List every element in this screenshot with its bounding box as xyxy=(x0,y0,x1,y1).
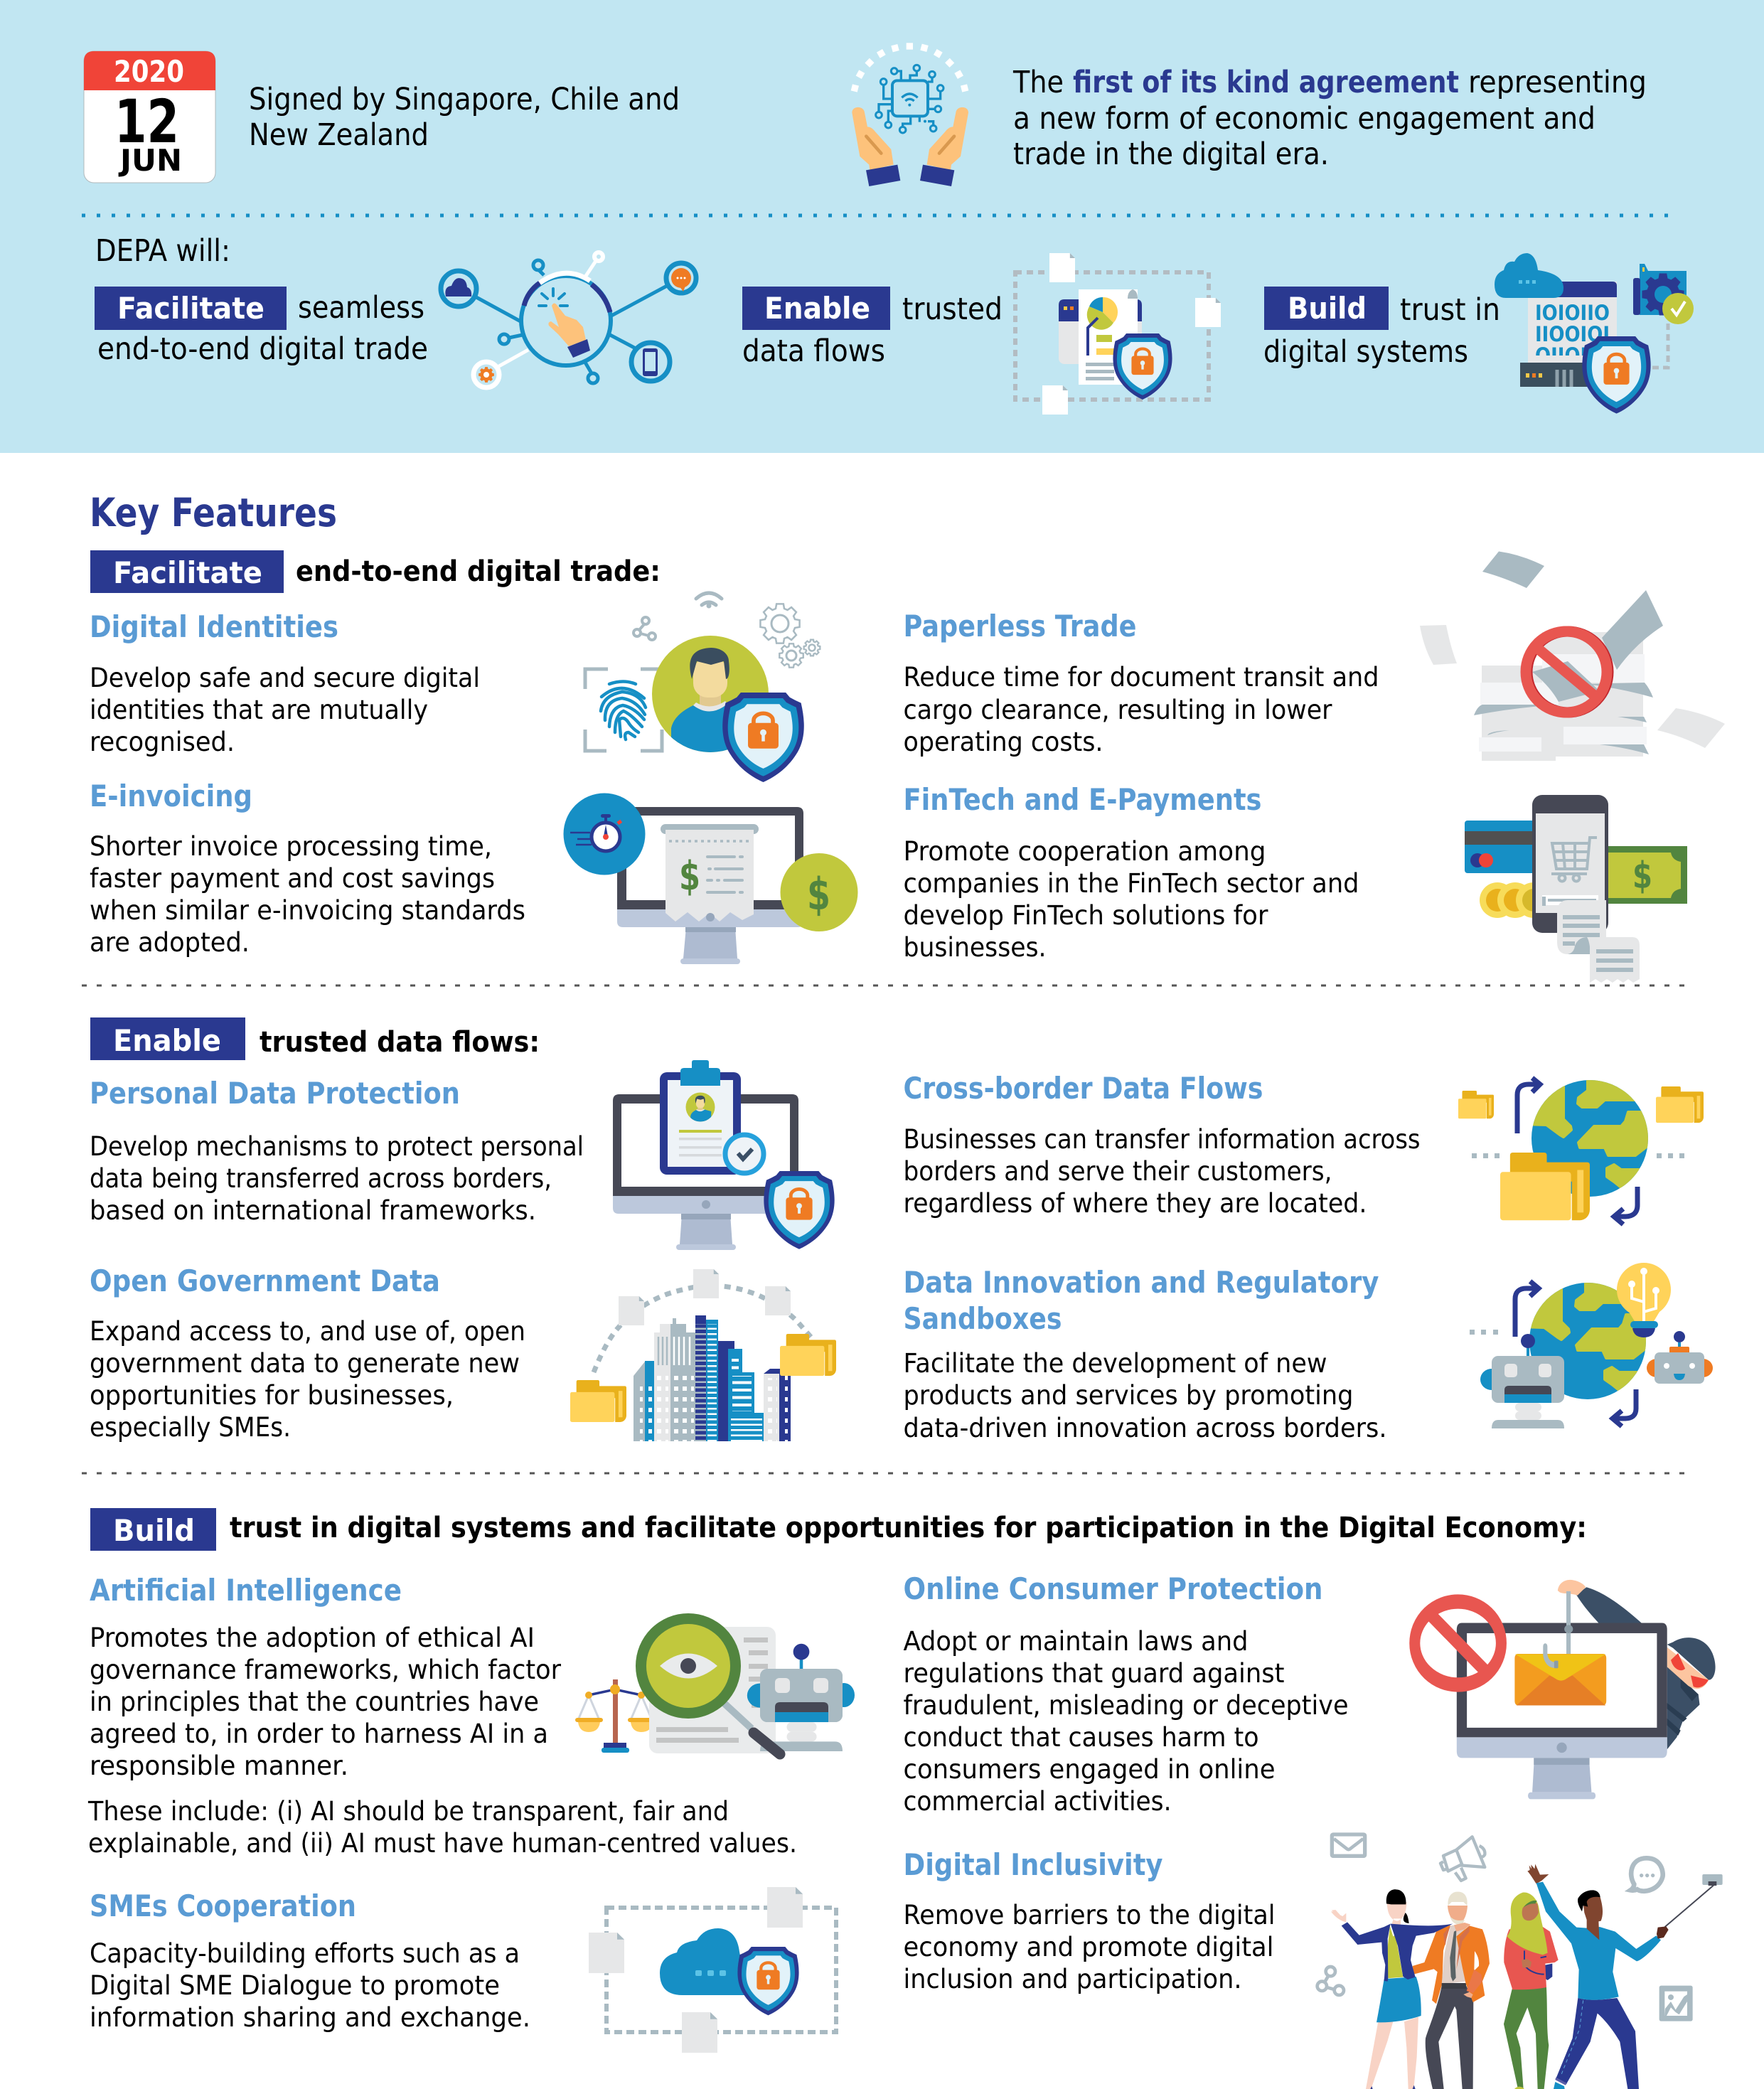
text: first of its kind agreement: first of its kind agreement xyxy=(1073,65,1459,100)
badge: Enable trusted: Enable xyxy=(764,291,870,326)
text: first of its kind agreement: a new form of economic engagement and xyxy=(1013,101,1595,137)
text block: Online Consumer Protection: Adopt or maintain laws and xyxy=(903,1626,1249,1657)
badge: Build trust in xyxy=(1263,287,1500,370)
text block: Digital Inclusivity: economy and promote digital xyxy=(903,1932,1274,1962)
icon: calendar 12 June 2020: JUN xyxy=(118,143,182,178)
text block: Data Innovation and Regulatory Sandboxes: Facilitate the development of new xyxy=(903,1348,1327,1379)
icon: AI ethics, magnifier, scales and robot xyxy=(575,1613,855,1754)
text block: Artificial Intelligence: responsible manner. xyxy=(90,1751,348,1781)
text block: Online Consumer Protection: Online Consumer Protection xyxy=(903,1571,1322,1606)
illustration: diverse group of people with digital icons xyxy=(1317,1834,1723,2089)
text: first of its kind agreement: trade in the digital era. xyxy=(1013,137,1329,172)
badge: Enable trusted: data flows xyxy=(742,333,885,369)
text block: Artificial Intelligence: governance frameworks, which factor xyxy=(90,1655,562,1685)
text: DEPA will: DEPA will: xyxy=(95,233,230,269)
icon: e-payments phone, card, cash xyxy=(1465,795,1687,983)
text block: Artificial Intelligence: in principles that the countries have xyxy=(90,1687,539,1717)
text block: Digital Identities: Digital Identities xyxy=(90,609,338,644)
icon: calendar 12 June 2020: 2020 xyxy=(114,54,184,89)
icon: data innovation globe, bulb and robots xyxy=(1470,1263,1713,1428)
text block: Cross-border Data Flows: Businesses can transfer information across xyxy=(903,1124,1421,1155)
text block: Cross-border Data Flows: Cross-border Data Flows xyxy=(903,1071,1263,1106)
text: first of its kind agreement xyxy=(1012,65,1647,172)
text block: E-invoicing: Shorter invoice processing time, xyxy=(90,831,492,862)
text block: SMEs Cooperation: Capacity-building efforts such as a xyxy=(90,1938,520,1969)
text block: E-invoicing xyxy=(90,779,525,958)
icon: digital identity with fingerprint and shield xyxy=(585,593,820,782)
icon: phishing thief behind monitor xyxy=(1415,1580,1716,1799)
heading: Build trust in digital systems: trust in digital systems and facilitate opportunities for participation in the Digital Economy: xyxy=(230,1512,1587,1544)
text block: Artificial Intelligence: Artificial Intelligence xyxy=(90,1573,402,1608)
icon: secure digital systems with server, cloud and gear folder: IIOOIOI xyxy=(1535,322,1610,346)
icon: personal data clipboard on monitor xyxy=(613,1060,835,1250)
heading: Enable trusted data flows: Enable xyxy=(113,1023,221,1058)
badge: Facilitate seamless: Facilitate xyxy=(117,291,264,326)
text block: Paperless Trade: cargo clearance, resulting in lower xyxy=(903,695,1332,725)
text: signatories: Signed by Singapore, Chile and xyxy=(249,82,680,117)
text block: Digital Inclusivity: Digital Inclusivity xyxy=(903,1847,1163,1882)
text block: SMEs Cooperation xyxy=(90,1888,530,2033)
text block: Digital Identities xyxy=(90,609,480,757)
text block: Artificial Intelligence: agreed to, in order to harness AI in a xyxy=(90,1719,548,1749)
text block: Cross-border Data Flows: borders and serve their customers, xyxy=(903,1156,1332,1187)
text block: Digital Inclusivity: Remove barriers to the digital xyxy=(903,1900,1276,1930)
text: first of its kind agreement: The xyxy=(1012,65,1064,100)
heading: Facilitate end-to-end digital trade xyxy=(90,550,661,593)
text block: Paperless Trade: Paperless Trade xyxy=(903,609,1136,643)
text block: Data Innovation and Regulatory Sandboxes: Sandboxes xyxy=(903,1301,1062,1336)
header panel xyxy=(0,0,1764,453)
icon: secure digital systems with server, cloud and gear folder xyxy=(1495,253,1694,414)
badge: Build trust in: trust in xyxy=(1400,292,1500,328)
text block: Open Government Data: government data to generate new xyxy=(90,1348,520,1379)
icon: e-payments phone, card, cash: $ xyxy=(1632,855,1652,897)
text block: Personal Data Protection: Personal Data Protection xyxy=(90,1076,460,1111)
icon: hands holding digital chip xyxy=(851,43,968,186)
text block: Open Government Data xyxy=(90,1263,525,1443)
badge: Enable trusted xyxy=(742,287,1003,369)
heading: Enable trusted data flows xyxy=(90,1017,540,1060)
text block: FinTech and E-Payments: develop FinTech solutions for xyxy=(903,900,1268,931)
icon: e-invoice on monitor with stopwatch and dollar: $ xyxy=(679,853,700,899)
text block: SMEs Cooperation: SMEs Cooperation xyxy=(90,1888,356,1923)
badge: Enable trusted: trusted xyxy=(902,292,1003,327)
text block: E-invoicing: are adopted. xyxy=(90,927,250,958)
text block: Open Government Data: Expand access to, and use of, open xyxy=(90,1316,525,1347)
text block: Paperless Trade: Reduce time for document transit and xyxy=(903,662,1379,693)
text block: Open Government Data: Open Government Data xyxy=(90,1263,440,1298)
heading: Build trust in digital systems: Build xyxy=(113,1513,195,1548)
badge: Facilitate seamless: end-to-end digital trade xyxy=(97,331,428,367)
text block: Digital Identities: recognised. xyxy=(90,727,235,757)
text block: Artificial Intelligence: Promotes the adoption of ethical AI xyxy=(90,1623,535,1653)
text block: FinTech and E-Payments xyxy=(903,782,1359,963)
text block: Digital Identities: Develop safe and secure digital xyxy=(90,663,480,693)
text block: Online Consumer Protection: consumers engaged in online xyxy=(903,1754,1276,1785)
icon: e-invoice on monitor with stopwatch and dollar: $ xyxy=(807,868,830,920)
text block: Personal Data Protection xyxy=(90,1076,584,1226)
text block: Personal Data Protection: Develop mechanisms to protect personal xyxy=(90,1131,584,1162)
text block: FinTech and E-Payments: businesses. xyxy=(903,932,1047,963)
text: signatories: New Zealand xyxy=(249,117,429,153)
badge: Facilitate seamless: seamless xyxy=(298,290,424,326)
text block: Cross-border Data Flows: regardless of where they are located. xyxy=(903,1188,1367,1219)
text block: Open Government Data: opportunities for businesses, xyxy=(90,1380,454,1411)
text block: Paperless Trade: operating costs. xyxy=(903,727,1103,757)
text block: Artificial Intelligence: explainable, and (ii) AI must have human-centred values. xyxy=(88,1828,797,1859)
text block: Cross-border Data Flows xyxy=(903,1071,1421,1219)
text block: Online Consumer Protection: fraudulent, misleading or deceptive xyxy=(903,1690,1348,1721)
text block: FinTech and E-Payments: FinTech and E-Payments xyxy=(903,782,1261,817)
heading: Facilitate end-to-end digital trade: end-to-end digital trade: xyxy=(296,555,661,588)
icon: open data city with folders xyxy=(570,1269,836,1441)
text block: Online Consumer Protection: regulations that guard against xyxy=(903,1658,1284,1689)
icon: connected network with pointing hand xyxy=(441,252,696,388)
icon: no paper stack xyxy=(1420,552,1725,761)
text block: Online Consumer Protection: conduct that causes harm to xyxy=(903,1722,1258,1753)
text block: Data Innovation and Regulatory Sandboxes: Data Innovation and Regulatory xyxy=(903,1265,1379,1300)
icon: secure data flows document xyxy=(1015,253,1221,415)
text block: FinTech and E-Payments: companies in the FinTech sector and xyxy=(903,868,1359,899)
text block: Online Consumer Protection xyxy=(903,1571,1348,1817)
icon: e-invoice on monitor with stopwatch and dollar xyxy=(563,794,857,964)
icon: calendar 12 June 2020 xyxy=(84,51,215,183)
icon: secure digital systems with server, cloud and gear folder: OIIOIOI xyxy=(1535,343,1610,368)
text block: E-invoicing: faster payment and cost savings xyxy=(90,863,495,894)
text block: E-invoicing: when similar e-invoicing standards xyxy=(90,895,525,926)
badge: Facilitate seamless xyxy=(95,287,428,367)
icon: calendar 12 June 2020: 12 xyxy=(114,87,179,156)
text block: Paperless Trade xyxy=(903,609,1379,757)
icon: cross-border globe with folders xyxy=(1458,1071,1704,1224)
text block: Personal Data Protection: data being transferred across borders, xyxy=(90,1163,552,1194)
text block: Artificial Intelligence xyxy=(87,1573,797,1859)
heading: Build trust in digital systems xyxy=(90,1508,1587,1551)
text block: Digital Inclusivity: inclusion and participation. xyxy=(903,1964,1241,1994)
text: first of its kind agreement: representing xyxy=(1468,65,1647,100)
text block: Data Innovation and Regulatory Sandboxes xyxy=(903,1265,1386,1443)
text block: E-invoicing: E-invoicing xyxy=(90,779,252,813)
text block: Data Innovation and Regulatory Sandboxes: data-driven innovation across borders. xyxy=(903,1413,1386,1443)
badge: Build trust in: Build xyxy=(1288,291,1367,326)
icon: secure digital systems with server, cloud and gear folder: IOIOIIO xyxy=(1535,301,1610,325)
text block: Personal Data Protection: based on international frameworks. xyxy=(90,1195,536,1226)
icon: secure cloud with documents xyxy=(589,1887,836,2053)
text: signatories xyxy=(249,82,680,153)
text block: SMEs Cooperation: Digital SME Dialogue to promote xyxy=(90,1970,500,2001)
text block: Open Government Data: especially SMEs. xyxy=(90,1412,291,1443)
heading: Key Features: Key Features xyxy=(90,490,337,535)
text block: Digital Inclusivity xyxy=(903,1847,1276,1994)
badge: Build trust in: digital systems xyxy=(1263,334,1468,370)
text block: Artificial Intelligence: These include: (i) AI should be transparent, fair and xyxy=(87,1796,729,1827)
text block: FinTech and E-Payments: Promote cooperation among xyxy=(903,836,1266,867)
heading: Enable trusted data flows: trusted data flows: xyxy=(260,1026,540,1059)
text block: SMEs Cooperation: information sharing and exchange. xyxy=(90,2002,530,2033)
heading: Facilitate end-to-end digital trade: Facilitate xyxy=(113,555,262,590)
text block: Data Innovation and Regulatory Sandboxes: products and services by promoting xyxy=(903,1380,1354,1411)
text block: Online Consumer Protection: commercial activities. xyxy=(903,1786,1172,1817)
text block: Digital Identities: identities that are mutually xyxy=(90,695,428,725)
